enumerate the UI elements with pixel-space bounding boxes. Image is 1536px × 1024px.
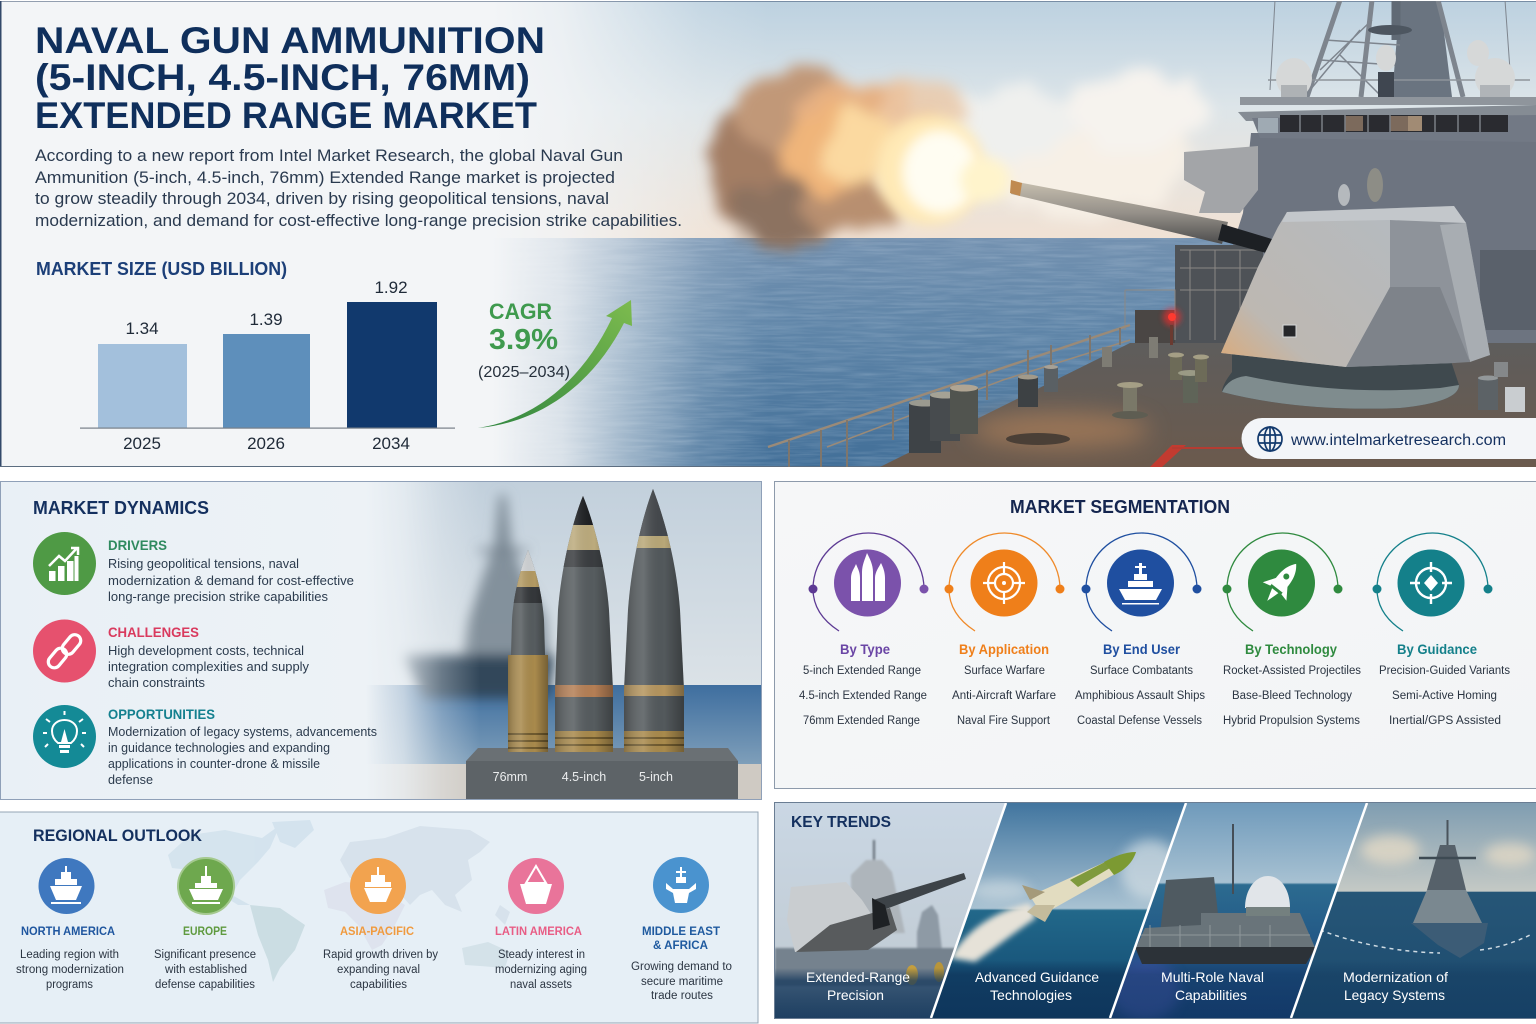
segment text: Amphibious Assault Ships	[1075, 690, 1205, 702]
intro paragraph: modernization, and demand for cost-effective long-range precision strike capabilities.	[35, 212, 682, 230]
segment text: 76mm Extended Range	[803, 715, 920, 727]
trend photo: modernization of legacy systems	[1285, 803, 1536, 1018]
ship superstructure	[1125, 97, 1536, 345]
region text: expanding naval	[337, 964, 420, 976]
icon: ship	[178, 858, 234, 914]
ship deck	[880, 343, 1536, 467]
trend labels: Legacy Systems	[1344, 987, 1445, 1003]
region text: ASIA-PACIFIC	[340, 926, 414, 938]
title: EXTENDED RANGE MARKET	[35, 95, 537, 136]
icon: guidance crosshair	[1372, 533, 1492, 631]
drivers text: long-range precision strike capabilities	[108, 589, 328, 604]
challenges text: chain constraints	[108, 675, 205, 690]
icon: rocket	[1222, 533, 1342, 631]
region text: NORTH AMERICA	[21, 926, 115, 938]
region text: programs	[46, 979, 93, 991]
4.5-inch round	[555, 496, 613, 752]
muzzle blast smoke	[707, 68, 1010, 247]
opportunities item	[33, 705, 377, 787]
drivers text: modernization & demand for cost-effective	[108, 573, 354, 588]
chart heading: MARKET SIZE (USD BILLION)	[36, 259, 287, 279]
round labels	[493, 772, 672, 781]
bar chart: market size	[80, 278, 455, 453]
region text: Leading region with	[20, 949, 119, 961]
hero photo: warship firing naval gun at sea	[0, 0, 1536, 468]
trend labels: Modernization of	[1343, 969, 1448, 985]
CAGR callout	[478, 299, 570, 381]
region text: Steady interest in	[498, 949, 585, 961]
segment text: By Technology	[1245, 641, 1337, 657]
background clouds	[940, 72, 1210, 215]
gun barrel	[1010, 180, 1275, 254]
region text	[495, 926, 587, 991]
region text: & AFRICA	[653, 940, 708, 952]
region text: Significant presence	[154, 949, 256, 961]
segment: by type	[799, 533, 928, 727]
region text: naval assets	[510, 979, 572, 991]
website url: www.intelmarketresearch.com	[1290, 432, 1506, 449]
segment text: Surface Warfare	[964, 665, 1045, 677]
world map background	[168, 820, 510, 982]
deck bollards	[909, 337, 1525, 453]
segment text: By Type	[840, 641, 890, 657]
bar chart: market size: 1.92	[374, 278, 408, 297]
heading: market segmentation: MARKET SEGMENTATION	[1010, 497, 1230, 517]
panel: regional outlook	[0, 812, 758, 1023]
icon: ship	[38, 858, 94, 914]
arrow: growth	[478, 300, 632, 428]
title	[35, 20, 545, 136]
trend labels: Extended-Range	[806, 969, 910, 985]
segment: by technology	[1222, 533, 1361, 727]
icon: growth chart	[33, 532, 96, 595]
bar chart: market size: 2025	[123, 434, 161, 453]
segment text: By End User	[1103, 641, 1181, 657]
bar chart: market size: 2034	[372, 434, 410, 453]
segment text	[1223, 641, 1361, 727]
region text: with established	[164, 964, 247, 976]
trend photo: multi-role naval capabilities	[1105, 803, 1375, 1020]
icon: warship	[1082, 533, 1202, 631]
trend labels: Capabilities	[1175, 987, 1247, 1003]
title: (5-INCH, 4.5-INCH, 76MM)	[35, 57, 530, 98]
opportunities text: OPPORTUNITIES	[108, 706, 215, 722]
segment text: 4.5-inch Extended Range	[799, 690, 927, 702]
challenges text	[108, 624, 309, 690]
panel: market dynamics	[0, 482, 762, 800]
round labels: 76mm	[493, 770, 527, 784]
segment text: Surface Combatants	[1090, 665, 1193, 677]
region text: Rapid growth driven by	[323, 949, 438, 961]
76mm round	[508, 550, 548, 752]
segment: by guidance	[1372, 533, 1510, 727]
challenges text: integration complexities and supply	[108, 659, 309, 674]
icon: ship	[653, 857, 709, 913]
trend labels: Advanced Guidance	[975, 969, 1099, 985]
segment text: Coastal Defense Vessels	[1077, 715, 1202, 727]
trend labels: Multi-Role Naval	[1161, 969, 1264, 985]
segment text: Rocket-Assisted Projectiles	[1223, 665, 1361, 677]
region text: modernizing aging	[495, 964, 587, 976]
challenges item	[33, 620, 309, 690]
icon: chain links	[33, 620, 96, 682]
trend dividers	[931, 803, 1367, 1018]
segment text: Semi-Active Homing	[1392, 690, 1497, 702]
trend labels: Technologies	[990, 987, 1072, 1003]
region: europe	[154, 858, 256, 991]
round labels: 5-inch	[639, 770, 673, 784]
region text: Growing demand to	[631, 961, 732, 973]
trend photo: extended-range precision	[775, 803, 1015, 1018]
bar chart: market size: 1.39	[249, 310, 283, 329]
gun turret	[1221, 206, 1490, 409]
segment text	[799, 641, 927, 727]
segment: by end user	[1075, 533, 1205, 727]
radar domes	[1276, 40, 1515, 100]
segment: by application	[944, 533, 1064, 727]
segment text: Base-Bleed Technology	[1232, 690, 1352, 702]
deck railing	[768, 325, 1130, 467]
region text	[16, 926, 124, 991]
opportunities text: defense	[108, 772, 153, 787]
region text: secure maritime	[641, 976, 723, 988]
5-inch round	[624, 489, 684, 752]
segment text: 5-inch Extended Range	[803, 665, 921, 677]
icon: light bulb	[33, 705, 96, 768]
drivers text: Rising geopolitical tensions, naval	[108, 556, 299, 571]
trend labels	[806, 969, 1448, 1003]
segment text: By Guidance	[1397, 641, 1477, 657]
panel: key trends	[774, 802, 1536, 1020]
trend labels: Precision	[827, 987, 884, 1003]
region text: capabilities	[350, 979, 407, 991]
opportunities text: in guidance technologies and expanding	[108, 740, 330, 755]
CAGR callout: 3.9%	[489, 324, 558, 356]
segment text: Naval Fire Support	[957, 715, 1051, 727]
drivers text	[108, 537, 354, 604]
region text: LATIN AMERICA	[495, 926, 582, 938]
drivers text: DRIVERS	[108, 537, 167, 553]
round labels: 4.5-inch	[562, 770, 606, 784]
heading: market dynamics: MARKET DYNAMICS	[33, 498, 209, 518]
intro paragraph	[35, 147, 682, 230]
photo: ammunition rounds with blurred warship	[373, 482, 761, 799]
CAGR callout: CAGR	[489, 299, 552, 324]
challenges text: CHALLENGES	[108, 624, 199, 640]
panel: market segmentation	[774, 482, 1536, 788]
opportunities text: Modernization of legacy systems, advancements	[108, 724, 377, 739]
segment text: By Application	[959, 641, 1049, 657]
region text	[631, 926, 732, 1002]
segment text: Hybrid Propulsion Systems	[1223, 715, 1360, 727]
heading: key trends: KEY TRENDS	[791, 814, 891, 831]
region text: MIDDLE EAST	[642, 926, 720, 938]
region text	[154, 926, 256, 991]
ship mast lattice	[1268, 0, 1530, 97]
segment text: Precision-Guided Variants	[1379, 665, 1510, 677]
CAGR callout: (2025–2034)	[478, 364, 570, 381]
drivers item	[33, 532, 354, 604]
region text: trade routes	[651, 990, 713, 1002]
bar chart: market size: 2026	[247, 434, 285, 453]
segment text: Inertial/GPS Assisted	[1389, 715, 1501, 727]
heading: regional outlook: REGIONAL OUTLOOK	[33, 826, 203, 845]
region text: EUROPE	[183, 926, 227, 938]
segment text	[1379, 641, 1510, 727]
region: latin america	[495, 858, 587, 991]
challenges text: High development costs, technical	[108, 643, 304, 658]
intro paragraph: Ammunition (5-inch, 4.5-inch, 76mm) Extended Range market is projected	[35, 169, 615, 187]
region: north america	[16, 858, 124, 991]
region: middle east and africa	[631, 857, 732, 1002]
bar chart: market size: 1.34	[125, 319, 159, 338]
intro paragraph: to grow steadily through 2034, driven by rising geopolitical tensions, naval	[35, 190, 609, 208]
title: NAVAL GUN AMMUNITION	[35, 20, 545, 61]
panel: hero banner	[0, 0, 1536, 468]
segment text: Anti-Aircraft Warfare	[952, 690, 1056, 702]
region: asia-pacific	[323, 858, 438, 991]
segment text	[952, 641, 1056, 727]
ammunition display base	[466, 748, 738, 799]
icon: ammunition rounds	[808, 533, 928, 631]
website pill	[1242, 418, 1536, 459]
opportunities text: applications in counter-drone & missile	[108, 756, 320, 771]
intro paragraph: According to a new report from Intel Market Research, the global Naval Gun	[35, 147, 623, 165]
segment text	[1075, 641, 1205, 727]
opportunities text	[108, 706, 377, 787]
trend photo: advanced guidance technologies	[925, 803, 1195, 1018]
region text	[323, 926, 438, 991]
region text: defense capabilities	[155, 979, 255, 991]
icon: ship	[350, 858, 406, 914]
icon: globe	[1258, 427, 1282, 451]
icon: ship	[508, 858, 564, 914]
icon: target	[944, 533, 1064, 631]
region text: strong modernization	[16, 964, 124, 976]
red signal light	[1163, 308, 1181, 345]
